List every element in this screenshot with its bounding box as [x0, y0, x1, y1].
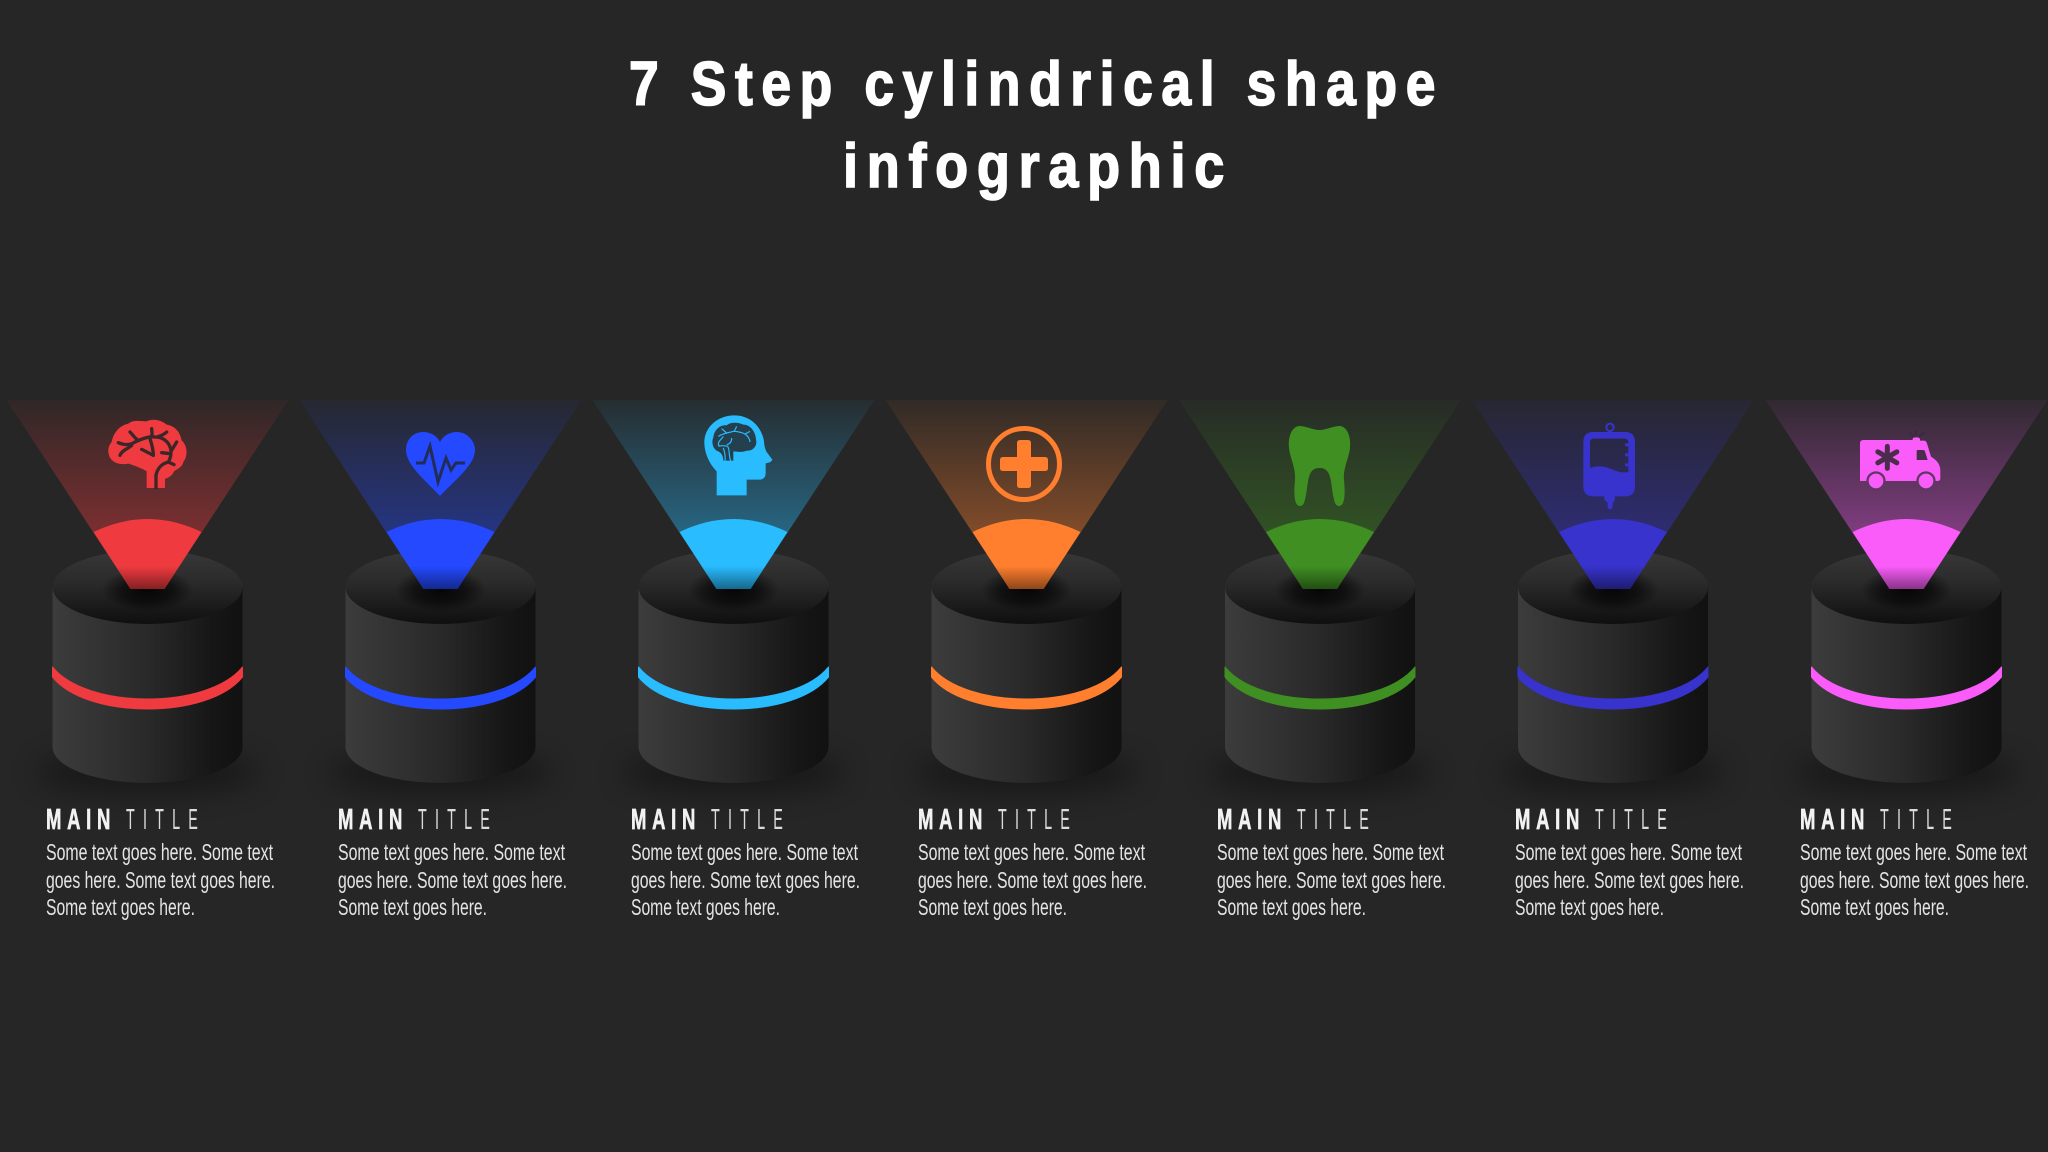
title [629, 50, 1444, 201]
step 4 text: Some text goes here. Some text [918, 839, 1145, 865]
step 4: orange medical cross [886, 400, 1168, 920]
cylinder 6 [1501, 550, 1725, 794]
step 5 text: MAIN [1217, 804, 1287, 836]
light cone 3 [592, 400, 874, 589]
cylinder 3 [622, 550, 846, 794]
step 4 text: goes here. Some text goes here. [918, 867, 1147, 893]
step 7 text: MAIN [1800, 804, 1870, 836]
icon: tooth [1289, 426, 1350, 506]
step 3 text: goes here. Some text goes here. [631, 867, 860, 893]
step 3 text: MAIN [631, 804, 701, 836]
step 5 text: Some text goes here. Some text [1217, 839, 1444, 865]
title: infographic [843, 132, 1233, 201]
step 6 text: MAIN [1515, 804, 1585, 836]
step 1 text: Some text goes here. [46, 894, 195, 920]
step 1: red brain [6, 400, 288, 920]
icon: heart with pulse [406, 432, 475, 496]
title: 7 Step cylindrical shape [629, 50, 1444, 119]
light cone 2 [300, 400, 582, 589]
step 3: cyan head [592, 400, 874, 920]
step 4 text [918, 804, 1147, 920]
step 1 text [46, 804, 275, 920]
step 2 text: goes here. Some text goes here. [338, 867, 567, 893]
step 1 text: goes here. Some text goes here. [46, 867, 275, 893]
step 3 text: Some text goes here. [631, 894, 780, 920]
light cone 5 [1179, 400, 1461, 589]
step 6 text: Some text goes here. [1515, 894, 1664, 920]
step 6 text: goes here. Some text goes here. [1515, 867, 1744, 893]
icon: head with brain [704, 415, 772, 495]
step 1 text: Some text goes here. Some text [46, 839, 273, 865]
icon: brain [108, 420, 187, 488]
step 2 text: TITLE [418, 804, 498, 836]
step 6 text: Some text goes here. Some text [1515, 839, 1742, 865]
step 1 text: TITLE [126, 804, 206, 836]
light cone 7 [1766, 400, 2048, 589]
step 1 text: MAIN [46, 804, 116, 836]
step 2 text: Some text goes here. Some text [338, 839, 565, 865]
step 7 text: Some text goes here. [1800, 894, 1949, 920]
step 2: blue heart [300, 400, 582, 920]
step 2 text: MAIN [338, 804, 408, 836]
step 4 text: Some text goes here. [918, 894, 1067, 920]
step 5 text: Some text goes here. [1217, 894, 1366, 920]
icon: cross in circle [988, 428, 1060, 500]
step 6 text [1515, 804, 1744, 920]
step 5 text [1217, 804, 1446, 920]
cylinder 2 [328, 550, 552, 794]
step 3 text [631, 804, 860, 920]
step 5 text: TITLE [1297, 804, 1377, 836]
step 7 text [1800, 804, 2029, 920]
icon: IV bag [1583, 424, 1635, 510]
cylinder 7 [1794, 550, 2018, 794]
step 5 text: goes here. Some text goes here. [1217, 867, 1446, 893]
step 4 text: MAIN [918, 804, 988, 836]
cylinder 1 [36, 550, 260, 794]
step 3 text: Some text goes here. Some text [631, 839, 858, 865]
step 5: green tooth [1179, 400, 1461, 920]
icon: ambulance [1860, 430, 1940, 491]
step 2 text: Some text goes here. [338, 894, 487, 920]
step 6 text: TITLE [1595, 804, 1675, 836]
step 6: indigo IV bag [1472, 400, 1754, 920]
step 2 text [338, 804, 567, 920]
step 4 text: TITLE [998, 804, 1078, 836]
step 3 text: TITLE [711, 804, 791, 836]
cylinder 5 [1208, 550, 1432, 794]
step 7 text: TITLE [1880, 804, 1960, 836]
cylinder 4 [914, 550, 1138, 794]
light cone 1 [6, 400, 288, 589]
light cone 6 [1472, 400, 1754, 589]
light cone 4 [886, 400, 1168, 589]
step 7: magenta ambulance [1766, 400, 2048, 920]
